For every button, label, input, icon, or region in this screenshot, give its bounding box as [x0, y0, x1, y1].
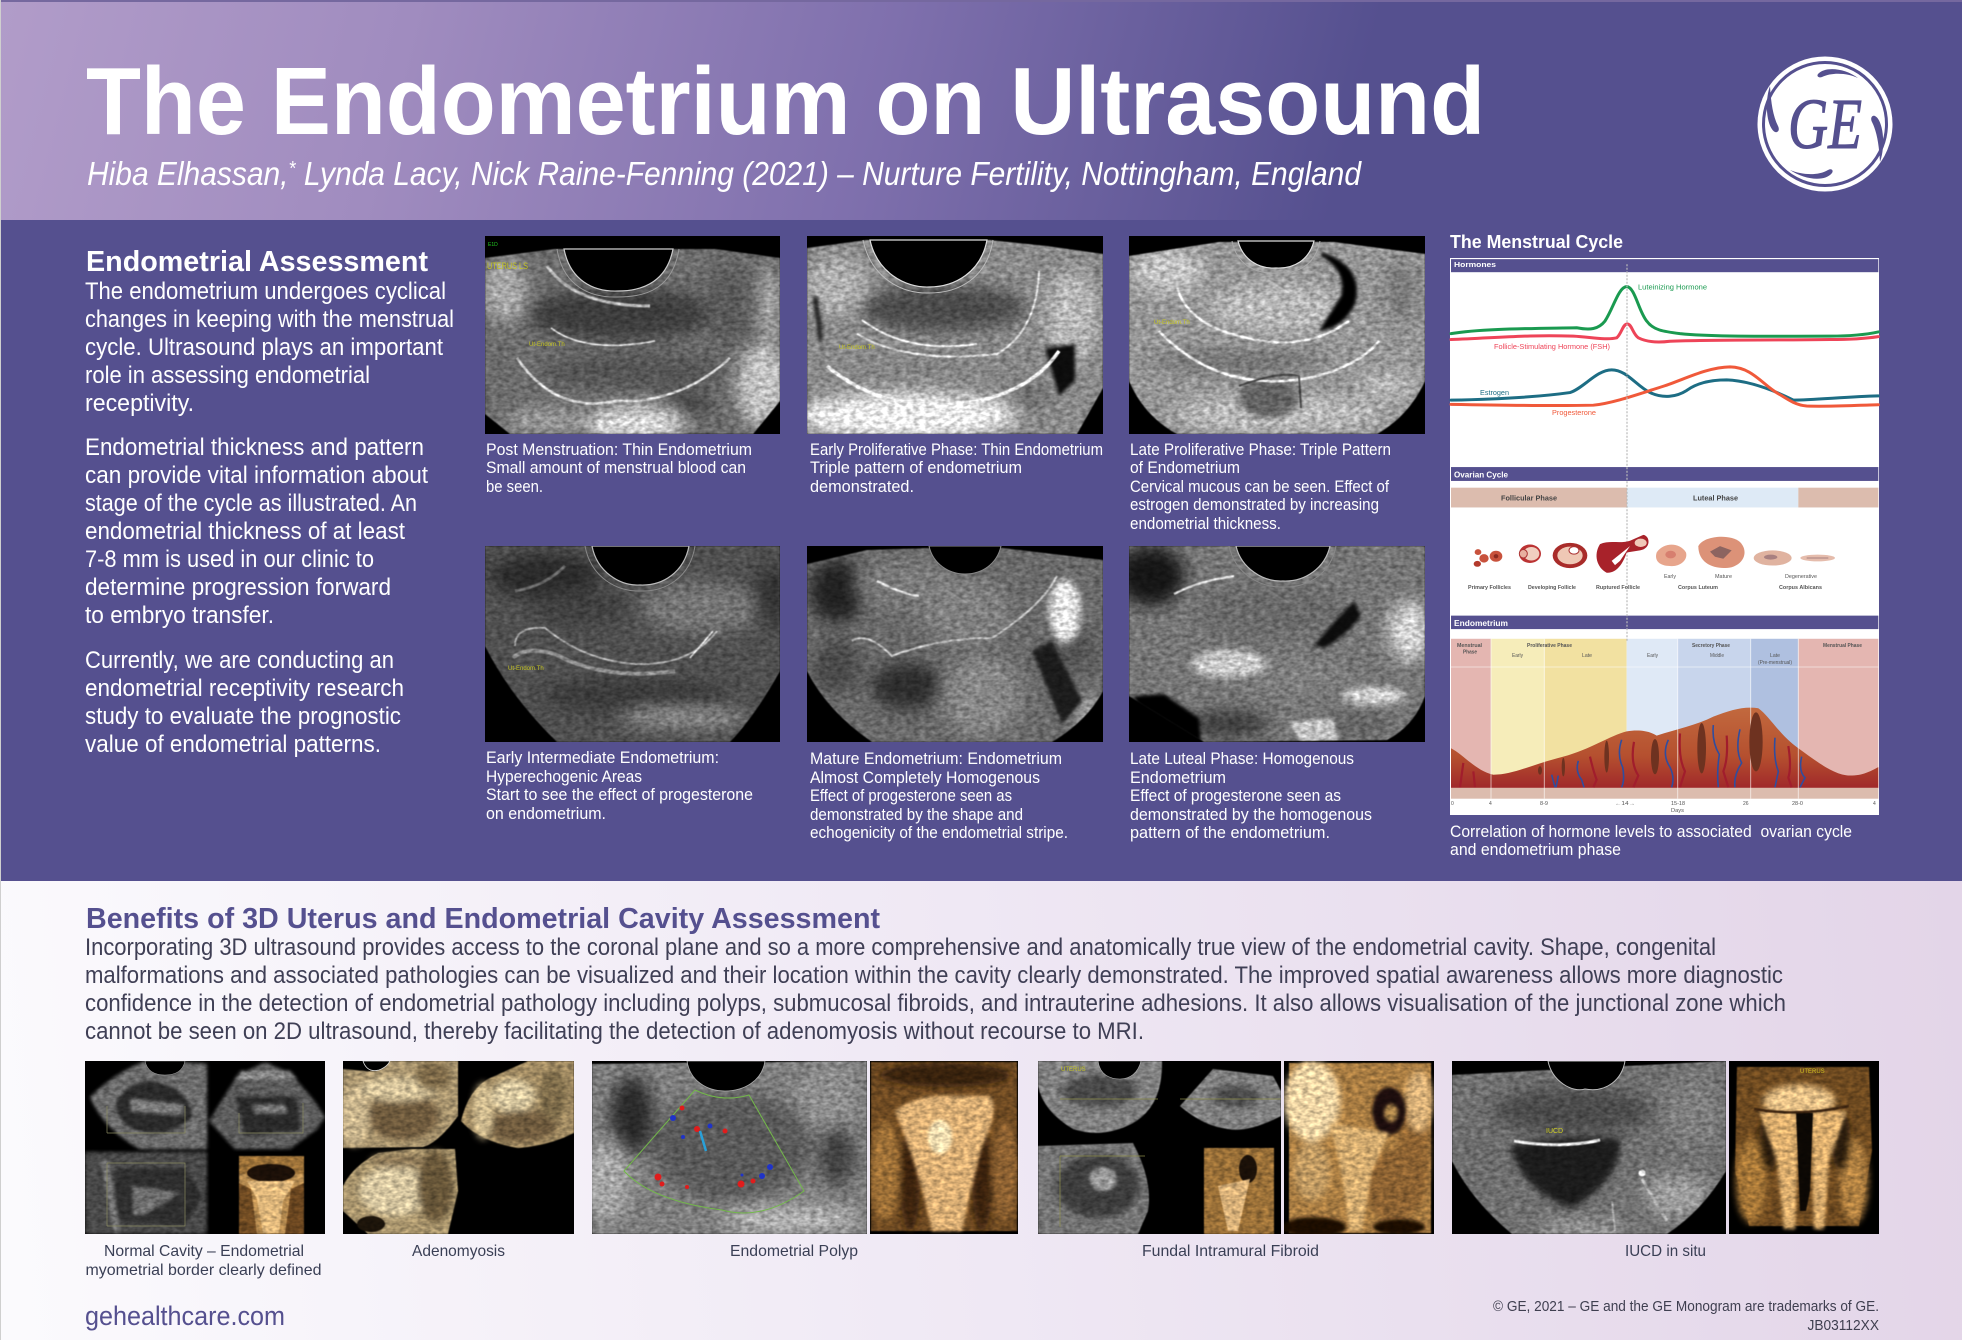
paragraph: benefits of 3D: Incorporating 3D ultrasound provides access to the coronal plane and so a more comprehensive and anatomically true view of the endometrial cavity. Shape, congenital — [85, 934, 1716, 961]
heading: endometrial assessment: Endometrial Assessment — [86, 246, 428, 278]
image: normal cavity multiplanar — [85, 1061, 325, 1234]
chart labels: Early — [1512, 653, 1523, 659]
ultrasound: early intermediate — [485, 546, 780, 742]
paragraph: benefits of 3D — [85, 934, 1786, 1045]
image: endometrial polyp ultrasound — [592, 1061, 867, 1234]
caption: early proliferative — [810, 441, 1103, 496]
copyright notice: © GE, 2021 – GE and the GE Monogram are trademarks of GE. — [1493, 1299, 1879, 1315]
ultrasound: late luteal — [1129, 546, 1425, 742]
caption: late luteal: Effect of progesterone seen as — [1130, 787, 1341, 805]
chart labels: 15-18 — [1671, 801, 1685, 807]
copyright notice — [1493, 1299, 1879, 1334]
chart labels: Follicular Phase — [1501, 496, 1557, 502]
caption: mature endometrium: demonstrated by the shape and — [810, 806, 1023, 824]
caption: early proliferative: demonstrated. — [810, 478, 914, 496]
ultrasound: post menstruation — [485, 236, 780, 434]
caption: adenomyosis: Adenomyosis — [412, 1243, 505, 1260]
paragraph 3 — [85, 647, 404, 758]
chart labels: Middle — [1710, 653, 1724, 659]
caption: late proliferative: Cervical mucous can be seen. Effect of — [1130, 478, 1389, 496]
caption: mature endometrium: Effect of progesterone seen as — [810, 787, 1012, 805]
caption: late proliferative: endometrial thickness. — [1130, 515, 1281, 533]
ultrasound: late proliferative — [1129, 236, 1425, 434]
paragraph 3: endometrial receptivity research — [85, 675, 404, 702]
ultrasound: post menstruation: UTERUS LS — [487, 261, 528, 271]
caption: normal cavity: myometrial border clearly defined — [86, 1262, 322, 1279]
chart labels — [1451, 260, 1876, 814]
caption: fundal fibroid: Fundal Intramural Fibroid — [1142, 1243, 1319, 1260]
caption: menstrual cycle chart: and endometrium phase — [1450, 841, 1621, 859]
caption: early intermediate: Early Intermediate Endometrium: — [486, 749, 719, 767]
heading: the menstrual cycle: The Menstrual Cycle — [1450, 232, 1623, 252]
chart labels: 28-0 — [1792, 801, 1803, 807]
caption: late luteal: pattern of the endometrium. — [1130, 824, 1330, 842]
chart labels: Ruptured Follicle — [1596, 585, 1640, 591]
caption: mature endometrium — [810, 750, 1068, 842]
paragraph 2: stage of the cycle as illustrated. An — [85, 490, 417, 517]
paragraph 1: receptivity. — [85, 390, 194, 417]
ultrasound: mature endometrium — [807, 546, 1103, 742]
chart labels: Luteal Phase — [1693, 496, 1738, 502]
paragraph 3: Currently, we are conducting an — [85, 647, 394, 674]
image: IUCD ultrasound — [1452, 1061, 1726, 1234]
chart labels: Early — [1647, 653, 1658, 659]
image: fundal fibroid multiplanar — [1038, 1061, 1281, 1234]
chart labels: Luteinizing Hormone — [1638, 284, 1707, 292]
chart labels: Hormones — [1454, 260, 1496, 269]
chart labels: Ovarian Cycle — [1454, 470, 1509, 480]
paragraph 2: endometrial thickness of at least — [85, 518, 405, 545]
caption: endometrial polyp: Endometrial Polyp — [730, 1243, 858, 1260]
GE logo — [1758, 56, 1892, 192]
image: endometrial polyp 3D — [870, 1061, 1018, 1234]
heading: benefits of 3D: Benefits of 3D Uterus and Endometrial Cavity Assessment — [86, 903, 880, 935]
title: The Endometrium on Ultrasound — [86, 48, 1485, 155]
ultrasound: early intermediate: Ut-Endom.Th — [508, 666, 544, 672]
paragraph 2: Endometrial thickness and pattern — [85, 434, 424, 461]
main panel background — [0, 220, 1962, 881]
paragraph 1: cycle. Ultrasound plays an important — [85, 334, 443, 361]
chart labels: Late — [1582, 653, 1592, 659]
chart labels: 4 — [1873, 801, 1876, 807]
chart: menstrual cycle — [1450, 258, 1879, 815]
caption: late luteal — [1130, 750, 1372, 842]
chart labels: 0 — [1451, 801, 1454, 807]
paragraph 2: to embryo transfer. — [85, 602, 274, 629]
ultrasound: late proliferative: Ut-Endom.Th — [1154, 320, 1190, 326]
caption: early intermediate — [486, 749, 753, 823]
paragraph: benefits of 3D: confidence in the detection of endometrial pathology including polyps, submucosal fibroids, and intrauterine adhesions. It also allows visualisation of the junctional zone which — [85, 990, 1786, 1017]
caption: late luteal: Endometrium — [1130, 769, 1226, 787]
paragraph 1 — [85, 278, 454, 417]
chart labels: 8-9 — [1540, 801, 1548, 807]
chart labels: 26 — [1743, 801, 1749, 807]
caption: early proliferative: Triple pattern of endometrium — [810, 459, 1022, 477]
chart labels: Corpus Albicans — [1779, 585, 1822, 591]
chart labels: (Pre-menstrual) — [1758, 660, 1792, 666]
ultrasound: post menstruation: Ut-Endom.Th — [529, 342, 565, 348]
paragraph 2: 7-8 mm is used in our clinic to — [85, 546, 374, 573]
chart labels: Progesterone — [1552, 410, 1596, 417]
caption: post menstruation: be seen. — [486, 478, 543, 496]
authors subtitle: Lynda Lacy, Nick Raine-Fenning (2021) – Nurture Fertility, Nottingham, England — [296, 155, 1362, 192]
paragraph 2: can provide vital information about — [85, 462, 428, 489]
chart labels: Days — [1671, 808, 1685, 814]
image: IUCD ultrasound: IUCD — [1546, 1128, 1563, 1135]
authors subtitle: Hiba Elhassan, — [87, 155, 309, 192]
chart labels: Developing Follicle — [1528, 585, 1576, 591]
paragraph 2: determine progression forward — [85, 574, 391, 601]
panel: endometrial assessment text — [85, 246, 454, 758]
image: IUCD 3D — [1729, 1061, 1879, 1234]
authors subtitle: * — [288, 158, 297, 180]
chart labels: Estrogen — [1480, 388, 1509, 397]
chart labels: Mature — [1715, 574, 1732, 580]
chart labels: Menstrual — [1457, 643, 1483, 649]
caption: late proliferative: estrogen demonstrated by increasing — [1130, 496, 1379, 514]
lower section background — [0, 881, 1962, 1340]
caption: early intermediate: Start to see the effect of progesterone — [486, 786, 753, 804]
copyright notice: JB03112XX — [1808, 1318, 1879, 1334]
chart labels: Follicle-Stimulating Hormone (FSH) — [1494, 344, 1610, 351]
paragraph 2 — [85, 434, 428, 629]
caption: normal cavity: Normal Cavity – Endometrial — [104, 1243, 304, 1260]
chart labels: Endometrium — [1454, 619, 1508, 628]
caption: late proliferative: Late Proliferative Phase: Triple Pattern — [1130, 441, 1391, 459]
caption: menstrual cycle chart — [1450, 823, 1852, 859]
image: fundal fibroid 3D — [1284, 1061, 1434, 1234]
paragraph: benefits of 3D: malformations and associated pathologies can be visualized and their location within the cavity clearly demonstrated. The improved spatial awareness allows more diagnostic — [85, 962, 1783, 989]
caption: post menstruation — [486, 441, 752, 496]
header background — [0, 0, 1962, 220]
paragraph 1: The endometrium undergoes cyclical — [85, 278, 446, 305]
chart labels: Corpus Luteum — [1678, 585, 1719, 591]
caption: mature endometrium: echogenicity of the endometrial stripe. — [810, 824, 1068, 842]
ovarian follicle illustrations — [1474, 535, 1835, 573]
chart labels: Degenerative — [1785, 574, 1817, 580]
chart labels: Phase — [1463, 650, 1477, 656]
ultrasound: post menstruation: E1D — [488, 242, 498, 248]
caption: mature endometrium: Almost Completely Homogenous — [810, 769, 1040, 787]
caption: normal cavity — [86, 1243, 322, 1279]
image: adenomyosis — [343, 1061, 574, 1234]
chart labels: Late — [1770, 653, 1780, 659]
paragraph 3: study to evaluate the prognostic — [85, 703, 401, 730]
ultrasound: early proliferative — [807, 236, 1103, 434]
paragraph 1: role in assessing endometrial — [85, 362, 370, 389]
chart labels: Primary Follicles — [1468, 585, 1511, 591]
website link: gehealthcare.com — [85, 1301, 285, 1331]
chart labels: Proliferative Phase — [1527, 643, 1572, 649]
caption: post menstruation: Small amount of menstrual blood can — [486, 459, 746, 477]
paragraph: benefits of 3D: cannot be seen on 2D ultrasound, thereby facilitating the detection of adenomyosis without recourse to MRI. — [85, 1018, 1144, 1045]
paragraph 1: changes in keeping with the menstrual — [85, 306, 454, 333]
chart labels: Menstrual Phase — [1823, 643, 1862, 649]
chart labels: Secretory Phase — [1692, 643, 1730, 649]
chart labels: Early — [1664, 574, 1677, 580]
caption: post menstruation: Post Menstruation: Thin Endometrium — [486, 441, 752, 459]
chart labels: 4 — [1489, 801, 1492, 807]
caption: mature endometrium: Mature Endometrium: Endometrium — [810, 750, 1062, 768]
ultrasound: early proliferative: Ut-Endom.Th — [839, 345, 875, 351]
caption: late proliferative: of Endometrium — [1130, 459, 1240, 477]
caption: early intermediate: on endometrium. — [486, 805, 606, 823]
paragraph 3: value of endometrial patterns. — [85, 731, 381, 758]
caption: early intermediate: Hyperechogenic Areas — [486, 768, 642, 786]
chart labels: ←14→ — [1615, 801, 1635, 807]
caption: late luteal: demonstrated by the homogenous — [1130, 806, 1372, 824]
image: IUCD 3D: UTERUS — [1800, 1069, 1825, 1075]
GE logo: GE — [1788, 84, 1862, 164]
caption: early proliferative: Early Proliferative Phase: Thin Endometrium — [810, 441, 1103, 459]
image: fundal fibroid multiplanar: UTERUS — [1061, 1067, 1086, 1073]
caption: late luteal: Late Luteal Phase: Homogenous — [1130, 750, 1354, 768]
chart shapes — [1451, 259, 1878, 799]
caption: late proliferative — [1130, 441, 1391, 533]
caption: menstrual cycle chart: Correlation of hormone levels to associated ovarian cycle — [1450, 823, 1852, 841]
caption: IUCD: IUCD in situ — [1625, 1243, 1706, 1260]
